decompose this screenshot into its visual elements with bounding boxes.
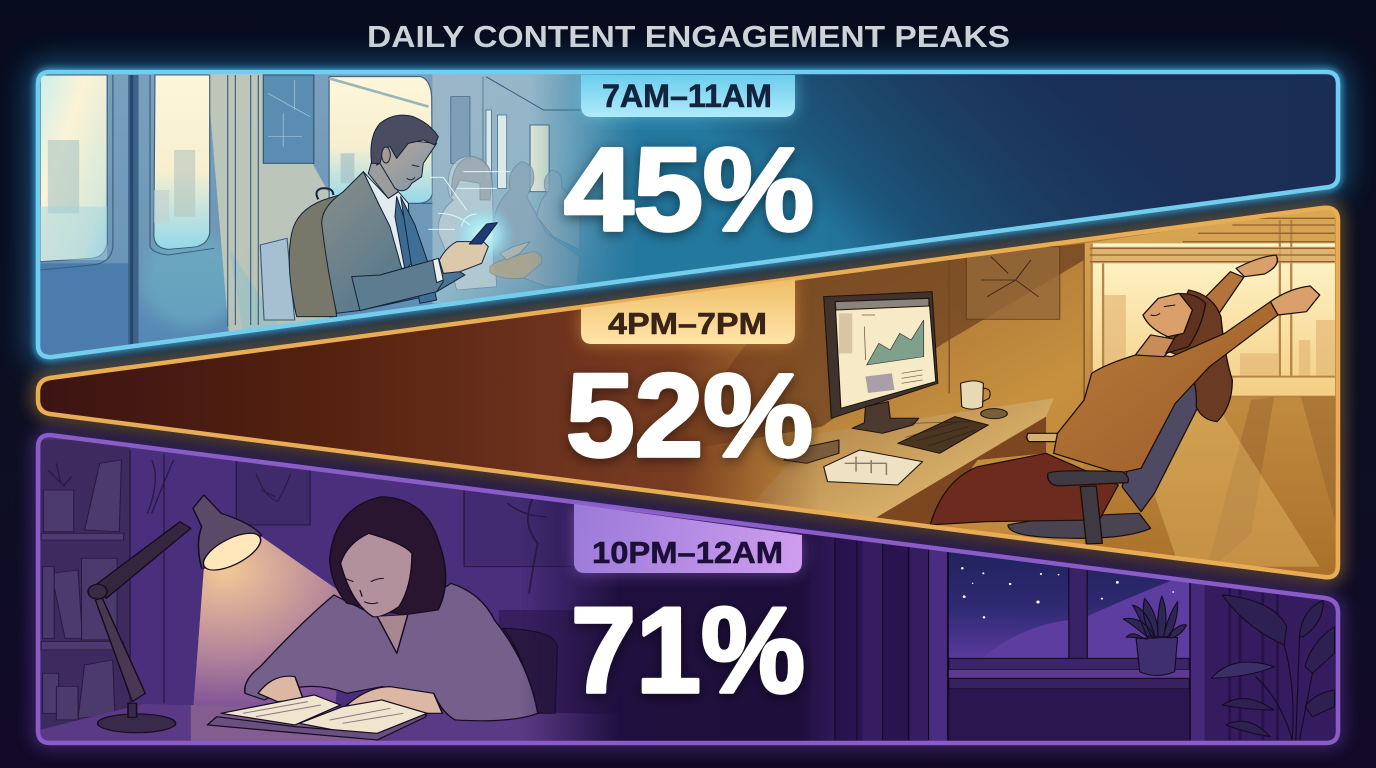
panel: morning commute xyxy=(34,70,1338,363)
reader xyxy=(503,628,557,713)
panel: after work xyxy=(38,200,1376,593)
houseplant xyxy=(1211,595,1334,740)
potted plant xyxy=(1123,596,1186,675)
panel: late night xyxy=(37,430,1344,750)
illustration: woman reading under lamp xyxy=(40,438,608,741)
background passengers xyxy=(438,156,580,290)
title: DAILY CONTENT ENGAGEMENT PEAKS xyxy=(367,19,1010,54)
time pill: late night xyxy=(574,504,802,573)
illustration: woman stretching at desk xyxy=(697,210,1336,575)
time pill: morning xyxy=(581,75,795,117)
commuter xyxy=(289,115,497,317)
time pill: late night: 10PM–12AM xyxy=(592,535,783,570)
monitor and chart xyxy=(784,292,1007,485)
time pill: after work xyxy=(581,279,795,344)
woman xyxy=(930,255,1320,544)
time pill: after work: 4PM–7PM xyxy=(608,306,767,341)
lamp xyxy=(88,495,268,733)
time pill: morning: 7AM–11AM xyxy=(602,78,772,114)
illustration: night window and plants xyxy=(811,534,1336,741)
statistic: morning: 45% xyxy=(564,124,814,256)
illustration: man on train using phone xyxy=(34,70,647,363)
statistic: late night: 71% xyxy=(571,582,805,718)
statistic: after work: 52% xyxy=(566,350,813,482)
table xyxy=(40,704,598,740)
